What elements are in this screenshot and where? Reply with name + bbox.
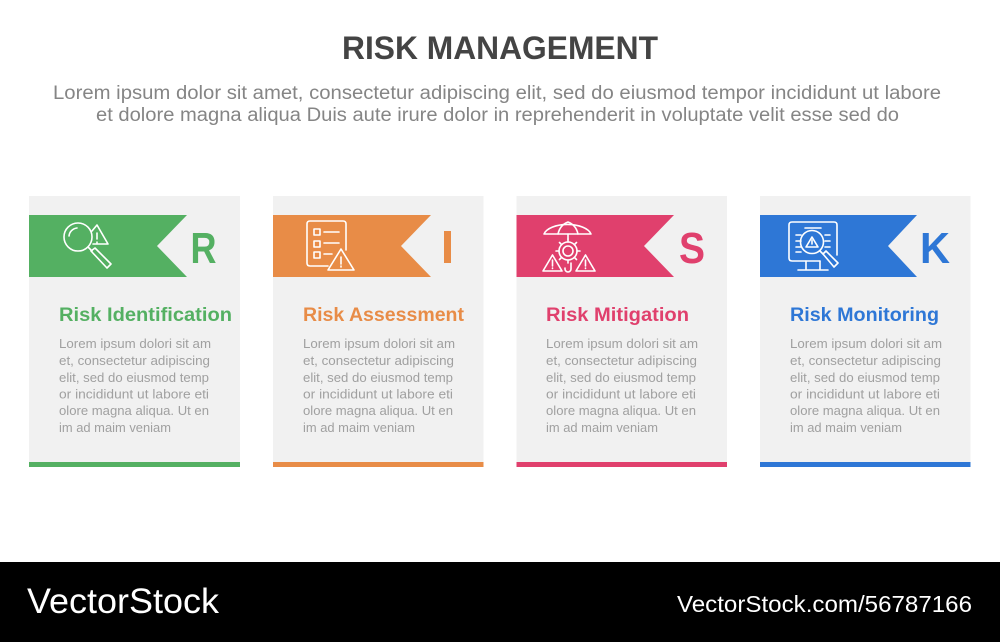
body text [546, 336, 698, 435]
ribbon [516, 215, 674, 277]
bottom accent bar [29, 462, 240, 467]
card background [760, 196, 970, 467]
body text [59, 336, 211, 435]
bottom accent bar [516, 462, 727, 467]
ribbon [273, 215, 431, 277]
body text: im ad maim veniam [303, 420, 415, 435]
heading: Risk Mitigation [546, 305, 689, 326]
card background [29, 196, 240, 467]
letter R: R [190, 224, 216, 273]
bottom accent bar [760, 462, 970, 467]
heading: Risk Monitoring [790, 305, 939, 326]
heading: Risk Assessment [303, 305, 465, 326]
icon: magnifier with warning [64, 223, 111, 268]
body text: or incididunt ut labore eti [546, 386, 696, 402]
body text: olore magna aliqua. Ut en [546, 403, 696, 418]
icon: umbrella, gear and warnings [543, 222, 595, 272]
letter I [444, 231, 451, 263]
letter K: K [920, 224, 950, 273]
panel: risk identification [29, 196, 240, 467]
body text [303, 336, 455, 435]
ribbon [760, 215, 917, 277]
subtitle [53, 83, 941, 126]
body text: elit, sed do eiusmod temp [59, 370, 209, 385]
body text: olore magna aliqua. Ut en [59, 403, 209, 418]
icon: monitor with magnifier and warning [789, 222, 838, 270]
body text: or incididunt ut labore eti [790, 386, 940, 402]
body text: olore magna aliqua. Ut en [790, 403, 940, 418]
body text: et, consectetur adipiscing [59, 353, 210, 368]
body text: elit, sed do eiusmod temp [790, 370, 940, 385]
subtitle: et dolore magna aliqua Duis aute irure dolor in reprehenderit in voluptate velit esse sed do [96, 105, 899, 126]
body text: et, consectetur adipiscing [546, 353, 697, 368]
body text: elit, sed do eiusmod temp [546, 370, 696, 385]
body text: elit, sed do eiusmod temp [303, 370, 453, 385]
body text: et, consectetur adipiscing [790, 353, 941, 368]
bottom accent bar [273, 462, 484, 467]
body text: or incididunt ut labore eti [59, 386, 209, 402]
footer band: VectorStock [27, 582, 220, 621]
body text: et, consectetur adipiscing [303, 353, 454, 368]
panel: risk monitoring [760, 196, 970, 467]
body text: im ad maim veniam [546, 420, 658, 435]
body text: or incididunt ut labore eti [303, 386, 453, 402]
body text: im ad maim veniam [790, 420, 902, 435]
body text: Lorem ipsum dolori sit am [790, 336, 942, 351]
footer band [0, 562, 1000, 642]
card background [516, 196, 727, 467]
body text: im ad maim veniam [59, 420, 171, 435]
title: RISK MANAGEMENT [342, 30, 658, 66]
card background [273, 196, 484, 467]
heading: Risk Identification [59, 305, 232, 326]
ribbon [29, 215, 187, 277]
panel: risk assessment [273, 196, 484, 467]
icon: checklist with warning [307, 221, 354, 270]
body text [790, 336, 942, 435]
body text: Lorem ipsum dolori sit am [303, 336, 455, 351]
body text: Lorem ipsum dolori sit am [546, 336, 698, 351]
panel: risk mitigation [516, 196, 727, 467]
subtitle: Lorem ipsum dolor sit amet, consectetur adipiscing elit, sed do eiusmod tempor incididunt ut labore [53, 83, 941, 104]
footer band: VectorStock.com/56787166 [677, 591, 972, 617]
body text: Lorem ipsum dolori sit am [59, 336, 211, 351]
body text: olore magna aliqua. Ut en [303, 403, 453, 418]
letter S: S [679, 224, 705, 273]
